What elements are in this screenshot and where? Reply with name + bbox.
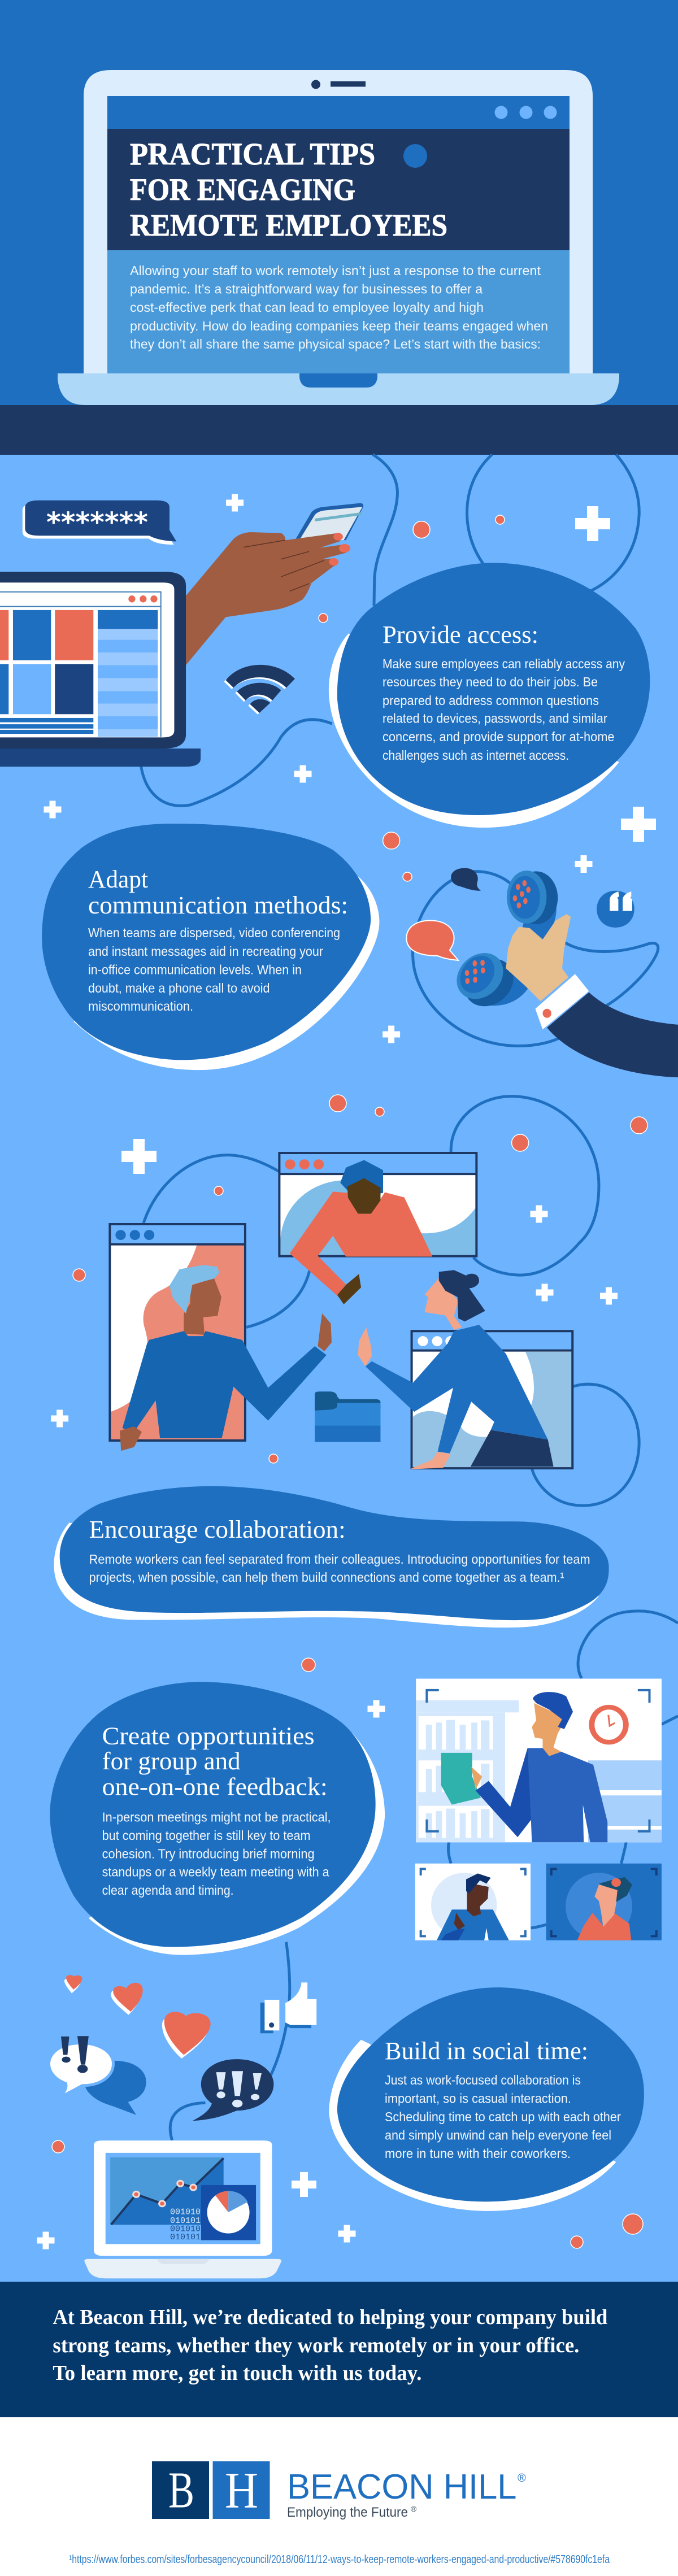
closing message: strong teams, whether they work remotely or in your office. [53, 2334, 579, 2357]
intro text: pandemic. It’s a straightforward way for businesses to offer a [130, 281, 483, 296]
laptop: chart and pie: 010101 [170, 2233, 201, 2242]
text: social time: Just as work-focused collaboration is [385, 2073, 581, 2087]
panel: provide access blob [329, 563, 650, 828]
text: adapt communication: miscommunication. [88, 999, 193, 1013]
icons: hearts [64, 1975, 211, 2059]
connector curves: provide access [141, 454, 639, 806]
text: provide access: concerns, and provide support for at-home [383, 729, 615, 744]
laptop: chart and pie: 010101 [170, 2216, 201, 2226]
text: encourage collaboration: projects, when possible, can help them build connections and come together as a team.¹ [89, 1570, 564, 1585]
icon: password speech bubble: ******* [46, 507, 148, 538]
logo: Beacon Hill [152, 2461, 526, 2520]
laptop: chart and pie: 001010 [170, 2208, 201, 2217]
text: provide access: Provide access: [383, 621, 538, 649]
text: adapt communication [88, 865, 348, 1013]
text: adapt communication: and instant messages aid in recreating your [88, 944, 323, 959]
closing message: At Beacon Hill, we’re dedicated to helping your company build [53, 2305, 607, 2329]
text: adapt communication: doubt, make a phone call to avoid [88, 981, 270, 995]
text: provide access: Make sure employees can reliably access any [383, 656, 625, 671]
text: feedback [102, 1722, 331, 1898]
text: adapt communication: communication methods: [88, 891, 348, 919]
text: feedback: standups or a weekly team meeting with a [102, 1865, 329, 1879]
closing message: To learn more, get in touch with us today. [53, 2361, 421, 2385]
intro text: they don’t all share the same physical space? Let’s start with the basics: [130, 337, 541, 351]
text: feedback: clear agenda and timing. [102, 1883, 234, 1898]
text: feedback: In-person meetings might not be practical, [102, 1810, 331, 1825]
video frame: woman on blue [546, 1864, 662, 1940]
intro text: cost-effective perk that can lead to employee loyalty and high [130, 300, 484, 315]
text: feedback: Create opportunities [102, 1722, 315, 1750]
decorative red dots [52, 515, 647, 2248]
text: adapt communication: When teams are dispersed, video conferencing [88, 925, 340, 940]
text: provide access: related to devices, passwords, and similar [383, 711, 607, 725]
logo: Beacon Hill: ® [411, 2504, 417, 2513]
video window: person in red [279, 1153, 476, 1304]
icon: thumbs up [260, 1982, 316, 2033]
panel: feedback blob [50, 1682, 385, 1955]
text: adapt communication: Adapt [88, 865, 148, 893]
logo: Beacon Hill: H [225, 2462, 258, 2518]
title [130, 137, 447, 242]
text: social time: and simply unwind can help everyone feel [385, 2127, 611, 2142]
video window: woman [358, 1270, 572, 1469]
video frame: man with document and clock [416, 1679, 662, 1842]
logo: Beacon Hill: B [168, 2462, 194, 2518]
text: social time [385, 2037, 621, 2161]
text: provide access [383, 621, 625, 763]
text: encourage collaboration: Remote workers can feel separated from their colleagues. Introducing opportunities for team [89, 1552, 590, 1567]
closing message [53, 2305, 607, 2385]
laptop: chart and pie [84, 2140, 281, 2278]
panel: social time blob [329, 1987, 644, 2211]
icon: folder [315, 1391, 380, 1442]
text: feedback: cohesion. Try introducing brief morning [102, 1846, 315, 1861]
hand holding phone [186, 503, 363, 665]
text: social time: important, so is casual interaction. [385, 2091, 571, 2106]
text: encourage collaboration: Encourage collaboration: [89, 1516, 346, 1543]
text: feedback: one-on-one feedback: [102, 1773, 328, 1801]
video window: man in blue [110, 1224, 332, 1451]
laptop: chart and pie: 001010 [170, 2225, 201, 2234]
text: social time: Scheduling time to catch up with each other [385, 2109, 621, 2124]
title: REMOTE EMPLOYEES [130, 208, 447, 242]
video frame: man on white [415, 1864, 531, 1940]
text: provide access: prepared to address common questions [383, 693, 599, 708]
laptop: dashboard [0, 572, 201, 767]
logo: Beacon Hill: Employing the Future [287, 2505, 408, 2520]
icon: password speech bubble [23, 501, 176, 545]
icon: wifi [224, 665, 295, 715]
header laptop illustration [58, 70, 619, 405]
text: feedback: for group and [102, 1747, 241, 1775]
logo: Beacon Hill: BEACON HILL [287, 2468, 516, 2507]
text: social time: more in tune with their coworkers. [385, 2146, 571, 2161]
intro text: productivity. How do leading companies keep their teams engaged when [130, 319, 548, 333]
title: PRACTICAL TIPS [130, 137, 375, 171]
text: feedback: but coming together is still key to team [102, 1828, 311, 1843]
intro text: Allowing your staff to work remotely isn’t just a response to the current [130, 263, 541, 278]
title: FOR ENGAGING [130, 172, 355, 207]
text: social time: Build in social time: [385, 2037, 588, 2065]
icon: speech bubbles with exclamation marks [49, 2036, 273, 2121]
intro text [130, 263, 548, 351]
text: provide access: challenges such as internet access. [383, 748, 569, 763]
connector curves: collaboration [144, 1096, 639, 1505]
text: encourage collaboration [89, 1516, 590, 1585]
logo: Beacon Hill: ® [518, 2472, 526, 2484]
panel: adapt communication blob [42, 824, 379, 1070]
panel: encourage collaboration blob [54, 1486, 609, 1628]
text: provide access: resources they need to do their jobs. Be [383, 675, 598, 689]
text: adapt communication: in-office communication levels. When in [88, 963, 302, 977]
phone illustration with cord, bubbles, hand [406, 868, 678, 1077]
connector curves: feedback [170, 1611, 678, 2140]
decorative plus signs [37, 494, 656, 2249]
